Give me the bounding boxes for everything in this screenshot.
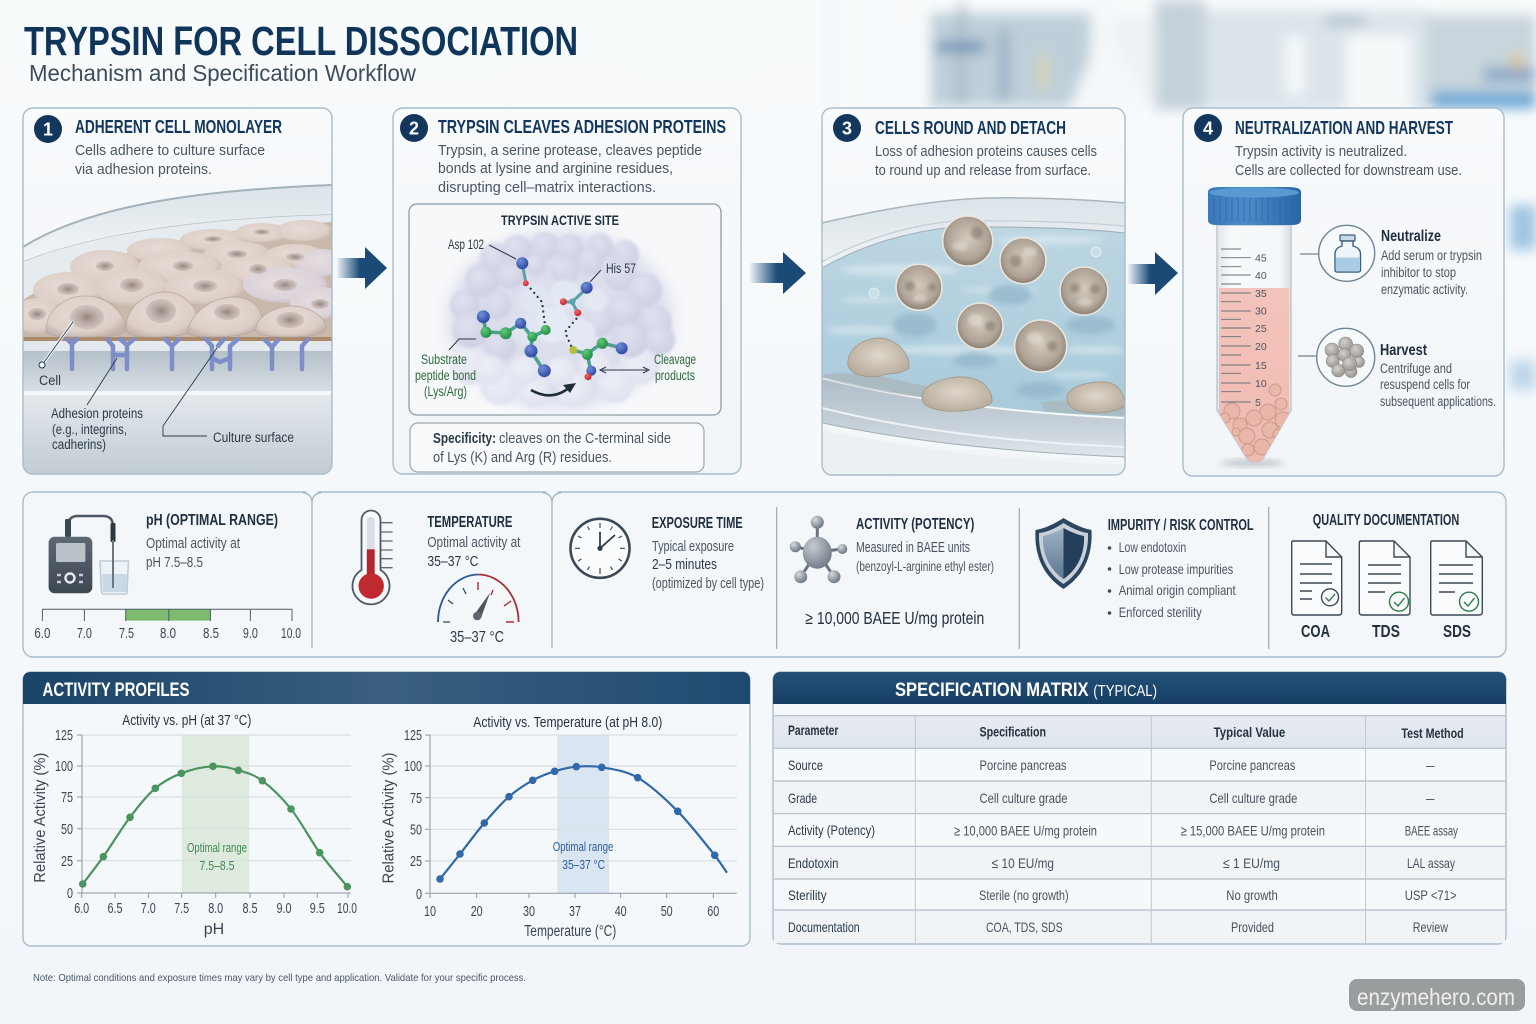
- step badge 4: 4: [1203, 118, 1213, 138]
- pH heading: pH (OPTIMAL RANGE): [146, 512, 278, 529]
- y axis labels temperature: 0: [416, 887, 422, 903]
- row: activity: [788, 822, 1458, 838]
- impurity list: [1108, 539, 1236, 620]
- arrow 3 to 4: [1128, 252, 1178, 295]
- section: exposure time: [570, 515, 764, 592]
- y axis labels pH: [55, 728, 73, 902]
- description 2: disrupting cell–matrix interactions.: [438, 179, 656, 196]
- exposure text: [652, 539, 764, 592]
- flattened cells: [848, 338, 1125, 413]
- watermark badge: enzymehero.com: [1357, 984, 1515, 1010]
- neutralize text: [1381, 228, 1482, 297]
- impurity list: Enforced sterility: [1119, 604, 1202, 620]
- tube scale numbers: 10: [1255, 378, 1267, 390]
- green activity curve: [79, 762, 351, 890]
- site labels: Asp 102: [448, 237, 484, 252]
- pH range scale: 6.0: [34, 626, 50, 642]
- blue activity curve: [436, 763, 727, 883]
- section: activity: [790, 516, 994, 628]
- section: quality documentation: [1292, 512, 1482, 641]
- tube scale numbers: 35: [1255, 288, 1267, 300]
- icon: COA document: [1292, 541, 1342, 615]
- exposure heading: EXPOSURE TIME: [652, 515, 743, 532]
- description 2: Trypsin, a serine protease, cleaves peptide: [438, 142, 702, 159]
- labels 1: (e.g., integrins,: [52, 422, 127, 437]
- leader: culture surface: [163, 348, 217, 436]
- panel 4: neutralization and harvest: [1183, 108, 1504, 476]
- x axis labels temperature: 10: [424, 904, 436, 920]
- row: activity: Activity (Potency): [788, 822, 875, 838]
- description 4: [1235, 144, 1462, 179]
- y axis title temperature: Relative Activity (%): [380, 752, 398, 884]
- x axis title temperature: Temperature (°C): [524, 923, 616, 940]
- atoms: [477, 257, 628, 380]
- activity value: ≥ 10,000 BAEE U/mg protein: [805, 608, 984, 628]
- icon: harvested cell cluster: [1298, 328, 1375, 386]
- row: grade: –: [1426, 790, 1435, 806]
- protein surface: [448, 232, 675, 408]
- pH range scale: 8.5: [203, 626, 219, 642]
- harvest text: Harvest: [1380, 342, 1428, 359]
- y axis labels temperature: 100: [404, 759, 422, 775]
- gauge value: 35–37 °C: [450, 629, 504, 646]
- section: impurity and risk control: [1035, 517, 1254, 620]
- pH range scale: 7.5: [119, 626, 134, 642]
- row: sterility: Sterility: [788, 887, 827, 903]
- description 4: Cells are collected for downstream use.: [1235, 163, 1462, 179]
- x axis labels pH: 9.0: [276, 901, 292, 917]
- description 1: [75, 142, 265, 178]
- row: endotoxin: LAL assay: [1407, 855, 1455, 871]
- x axis labels temperature: 40: [615, 904, 627, 920]
- row: sterility: USP <71>: [1405, 887, 1457, 903]
- icon: SDS document: [1431, 541, 1482, 615]
- optimal range label pH: [187, 840, 247, 873]
- pH range scale: 9.0: [243, 626, 258, 642]
- x axis labels temperature: 30: [523, 904, 535, 920]
- harvest text: subsequent applications.: [1380, 394, 1496, 409]
- panel: activity profiles: [23, 672, 750, 946]
- y axis labels temperature: 25: [410, 854, 422, 870]
- y axis labels temperature: [404, 728, 422, 903]
- x axis labels temperature: [424, 904, 719, 920]
- labels 1: cadherins): [52, 437, 106, 452]
- document labels: COA: [1301, 621, 1330, 641]
- specification header: [773, 672, 1506, 704]
- icon: molecule: [790, 516, 847, 583]
- tube scale numbers: 45: [1255, 252, 1267, 264]
- row: source: –: [1426, 757, 1435, 773]
- quality heading: QUALITY DOCUMENTATION: [1313, 512, 1459, 529]
- site labels: His 57: [606, 261, 636, 276]
- site labels: peptide bond: [415, 368, 476, 383]
- section: temperature: [352, 510, 520, 646]
- specificity callout: [410, 423, 704, 472]
- pH text: [146, 536, 240, 571]
- x axis labels pH: 6.5: [108, 901, 122, 917]
- panel 1: adherent cell monolayer: [13, 108, 350, 475]
- optimal range label temperature: Optimal range: [553, 839, 613, 854]
- row: sterility: No growth: [1226, 887, 1278, 903]
- exposure text: (optimized by cell type): [652, 576, 764, 592]
- pH range scale: 7.0: [77, 626, 92, 642]
- chart title pH: Activity vs. pH (at 37 °C): [122, 712, 251, 729]
- tube scale numbers: 40: [1255, 270, 1267, 282]
- row: grade: Cell culture grade: [1209, 790, 1298, 806]
- x axis labels temperature: 50: [661, 904, 673, 920]
- tube scale numbers: 5: [1255, 397, 1261, 409]
- pH text: pH 7.5–8.5: [146, 555, 203, 571]
- icon: shield: [1035, 518, 1092, 589]
- x axis labels pH: 10.0: [337, 901, 357, 917]
- optimal range label temperature: [553, 839, 613, 872]
- specification header: SPECIFICATION MATRIX: [895, 680, 1089, 701]
- cell nuclei: [905, 227, 1100, 351]
- impurity list: Low endotoxin: [1119, 539, 1186, 555]
- chart: activity vs temperature: [380, 714, 737, 940]
- row: source: Porcine pancreas: [1209, 757, 1295, 773]
- step badge 1: 1: [43, 120, 53, 140]
- arrow 1 to 2: [337, 247, 387, 289]
- y axis labels pH: 100: [55, 759, 73, 775]
- panel 2: trypsin cleaves adhesion proteins: [393, 108, 741, 474]
- site labels: Cleavage: [654, 352, 696, 367]
- icon: TDS document: [1359, 541, 1410, 615]
- description 3: [875, 144, 1097, 179]
- panel: specification matrix: [773, 672, 1506, 944]
- heading 2: TRYPSIN CLEAVES ADHESION PROTEINS: [438, 116, 726, 137]
- description 3: Loss of adhesion proteins causes cells: [875, 144, 1097, 160]
- neutralize text: enzymatic activity.: [1381, 282, 1468, 297]
- chart: activity vs pH: [32, 712, 357, 938]
- x axis labels pH: 7.5: [174, 901, 189, 917]
- x axis title pH: pH: [204, 921, 224, 938]
- optimal range label temperature: 35–37 °C: [562, 857, 605, 872]
- harvest text: Centrifuge and: [1380, 361, 1452, 376]
- labels 1: Adhesion proteins: [51, 406, 143, 421]
- row: documentation: Review: [1413, 919, 1449, 935]
- row: documentation: Documentation: [788, 919, 860, 935]
- step badge 3: 3: [842, 118, 852, 138]
- x axis labels pH: 8.0: [208, 901, 223, 917]
- site labels: Substrate: [421, 352, 467, 367]
- optimal range label pH: Optimal range: [187, 840, 247, 855]
- neutralize text: Add serum or trypsin: [1381, 248, 1482, 263]
- heading 1: ADHERENT CELL MONOLAYER: [75, 116, 282, 137]
- activity text: [856, 540, 994, 574]
- leader: adhesion proteins: [87, 358, 117, 405]
- optimal range label pH: 7.5–8.5: [200, 858, 234, 873]
- description 1: Cells adhere to culture surface: [75, 142, 265, 159]
- y axis labels pH: 75: [61, 790, 73, 806]
- tube scale numbers: 25: [1255, 323, 1267, 335]
- labels 1: Cell: [39, 373, 61, 388]
- labels 1: [39, 373, 294, 452]
- document labels: TDS: [1372, 621, 1400, 641]
- x axis labels pH: 7.0: [141, 901, 156, 917]
- title: TRYPSIN FOR CELL DISSOCIATION: [24, 18, 578, 64]
- panel outline: [822, 108, 1125, 475]
- arrow 2 to 3: [750, 252, 806, 294]
- leader: cell: [42, 322, 73, 365]
- step badge 4: [1194, 114, 1222, 142]
- row: documentation: COA, TDS, SDS: [986, 919, 1063, 935]
- table background and rules: [774, 716, 1505, 944]
- x axis labels temperature: 37: [569, 904, 581, 920]
- icon: pH meter: [49, 516, 128, 594]
- table header row: [788, 722, 1464, 741]
- exposure text: Typical exposure: [652, 539, 734, 555]
- activity profiles header: [23, 672, 750, 704]
- step badge 2: [400, 114, 428, 142]
- specificity callout: of Lys (K) and Arg (R) residues.: [433, 450, 612, 466]
- heading 3: CELLS ROUND AND DETACH: [875, 117, 1066, 138]
- table header row: Specification: [980, 724, 1046, 740]
- row: grade: Cell culture grade: [980, 790, 1068, 806]
- subtitle: Mechanism and Specification Workflow: [29, 60, 416, 86]
- row: activity: ≥ 15,000 BAEE U/mg protein: [1181, 822, 1325, 838]
- x axis labels temperature: 60: [707, 904, 719, 920]
- illustration: dish with rounded cells: [822, 198, 1125, 475]
- icon: clock: [570, 519, 630, 578]
- chart title temperature: Activity vs. Temperature (at pH 8.0): [473, 714, 662, 731]
- table header row: Parameter: [788, 722, 839, 738]
- activity profiles header: ACTIVITY PROFILES: [42, 680, 190, 701]
- tube scale numbers: 30: [1255, 306, 1267, 318]
- row: grade: [788, 790, 1435, 806]
- specificity callout: cleaves on the C-terminal side: [499, 431, 671, 447]
- footnote: Note: Optimal conditions and exposure times may vary by cell type and application. Validate for your specific process.: [33, 972, 526, 984]
- illustration: cell monolayer on culture surface: [13, 185, 350, 475]
- description 4: Trypsin activity is neutralized.: [1235, 144, 1407, 160]
- row: source: [788, 757, 1435, 773]
- active site diagram box: [409, 204, 721, 415]
- rounded cells: [896, 216, 1108, 372]
- site labels: [415, 237, 696, 399]
- exposure text: 2–5 minutes: [652, 556, 717, 573]
- row: source: Porcine pancreas: [980, 757, 1066, 773]
- icon: neutralizing bottle: [1300, 225, 1375, 281]
- tube scale numbers: 15: [1255, 360, 1267, 372]
- pH range scale: 8.0: [160, 626, 176, 642]
- description 2: bonds at lysine and arginine residues,: [438, 160, 673, 177]
- row: endotoxin: [788, 855, 1455, 871]
- y axis labels pH: 25: [61, 854, 73, 870]
- parameter strip: [23, 490, 1506, 657]
- y axis labels temperature: 50: [410, 822, 422, 838]
- tube scale numbers: 20: [1255, 341, 1267, 353]
- pH text: Optimal activity at: [146, 536, 240, 552]
- specificity callout: Specificity:: [433, 431, 496, 447]
- x axis labels pH: 8.5: [242, 901, 258, 917]
- panel outline: [23, 108, 332, 474]
- table header row: Test Method: [1401, 725, 1464, 741]
- icon: thermometer: [352, 510, 393, 604]
- impurity list: Low protease impurities: [1119, 561, 1233, 577]
- step badge 2: 2: [409, 118, 419, 138]
- section: pH: [34, 512, 301, 642]
- temperature text: [427, 535, 520, 570]
- bonds and hydrogen bonds: [483, 263, 622, 377]
- neutralize text: Neutralize: [1381, 228, 1441, 245]
- row: activity: BAEE assay: [1405, 822, 1458, 838]
- x axis labels pH: 6.0: [74, 901, 89, 917]
- pH range scale: 10.0: [281, 626, 301, 642]
- row: documentation: Provided: [1231, 919, 1274, 935]
- site labels: products: [655, 368, 695, 383]
- document labels: [1301, 621, 1471, 641]
- neutralize text: inhibitor to stop: [1381, 265, 1456, 280]
- row: sterility: [788, 887, 1457, 903]
- description 2: [438, 142, 702, 196]
- row: grade: Grade: [788, 790, 817, 806]
- active site heading: TRYPSIN ACTIVE SITE: [501, 213, 619, 228]
- description 1: via adhesion proteins.: [75, 161, 212, 178]
- y axis labels pH: 125: [55, 728, 73, 744]
- document labels: SDS: [1443, 621, 1471, 641]
- temperature text: Optimal activity at: [427, 535, 520, 551]
- y axis title pH: Relative Activity (%): [32, 753, 49, 883]
- site labels: (Lys/Arg): [424, 384, 467, 399]
- heading 4: NEUTRALIZATION AND HARVEST: [1235, 117, 1454, 138]
- panel 3: cells round and detach: [822, 108, 1125, 475]
- tube cap: [1208, 187, 1301, 225]
- table header row: Typical Value: [1214, 724, 1285, 740]
- activity text: (benzoyl-L-arginine ethyl ester): [856, 558, 994, 574]
- activity text: Measured in BAEE units: [856, 540, 970, 556]
- specification header: (TYPICAL): [1093, 683, 1157, 700]
- description 3: to round up and release from surface.: [875, 163, 1091, 179]
- title: [24, 18, 578, 86]
- labels 1: Culture surface: [213, 430, 294, 445]
- illustration: conical tube: [1208, 187, 1301, 468]
- x axis labels temperature: 20: [471, 904, 483, 920]
- harvest text: resuspend cells for: [1380, 377, 1470, 392]
- row: documentation: [788, 919, 1449, 935]
- row: sterility: Sterile (no growth): [979, 887, 1069, 903]
- reaction arrow: [531, 383, 576, 395]
- icons: adhesion proteins: [67, 339, 308, 369]
- step badge 3: [833, 114, 861, 142]
- impurity heading: IMPURITY / RISK CONTROL: [1108, 517, 1254, 534]
- impurity list: Animal origin compliant: [1119, 582, 1236, 598]
- activity heading: ACTIVITY (POTENCY): [856, 516, 974, 533]
- y axis labels pH: 50: [61, 822, 73, 838]
- temperature heading: TEMPERATURE: [427, 514, 513, 531]
- row: activity: ≥ 10,000 BAEE U/mg protein: [954, 822, 1097, 838]
- tube scale numbers: [1255, 252, 1267, 409]
- row: source: Source: [788, 757, 823, 773]
- pH range scale: [34, 609, 301, 642]
- tube graduations: [1221, 249, 1251, 402]
- row: endotoxin: ≤ 10 EU/mg: [992, 855, 1054, 871]
- row: endotoxin: ≤ 1 EU/mg: [1223, 855, 1280, 871]
- y axis labels pH: 0: [67, 886, 73, 902]
- x axis labels pH: [74, 901, 357, 917]
- y axis labels temperature: 75: [410, 791, 422, 807]
- y axis labels temperature: 125: [404, 728, 422, 744]
- x axis labels pH: 9.5: [310, 901, 325, 917]
- harvest text: [1380, 342, 1496, 409]
- temperature text: 35–37 °C: [427, 553, 479, 570]
- row: endotoxin: Endotoxin: [788, 855, 838, 871]
- gauge: [438, 574, 519, 622]
- step badge 1: [34, 115, 62, 143]
